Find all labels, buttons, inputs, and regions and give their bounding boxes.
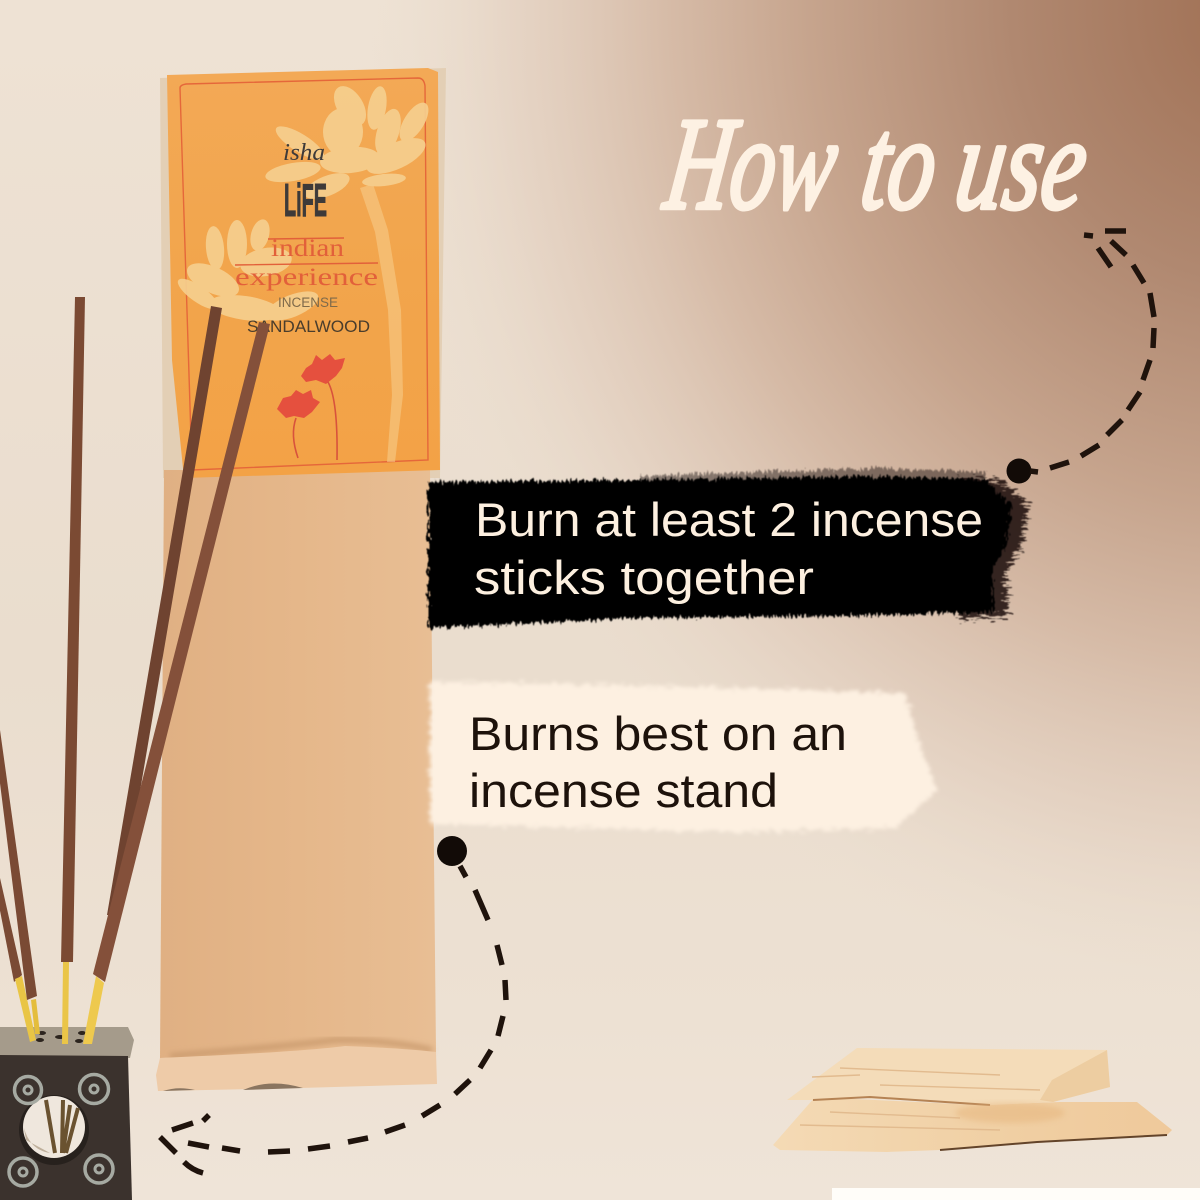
incense stick: right pair: [83, 306, 270, 1044]
incense stick: left: [0, 730, 40, 1034]
stand rivets: [9, 1074, 113, 1186]
arrow: callout to title: [1006, 231, 1154, 484]
package bottom flap: [156, 1046, 437, 1091]
cream brush callout: [430, 681, 937, 832]
title: [657, 91, 1097, 237]
callout text: [469, 707, 847, 817]
brush top bristles: [640, 468, 985, 490]
lower lotus petals: [204, 225, 226, 271]
package wrapper edge: [160, 68, 446, 478]
product name: [235, 235, 378, 291]
product name: experience: [235, 264, 378, 291]
arrow: callout to stand: [160, 836, 506, 1173]
title: to: [854, 91, 947, 237]
product type: INCENSE: [278, 295, 338, 310]
incense stick: centre: [61, 297, 85, 1044]
stand top face: [0, 1027, 134, 1058]
sandalwood pieces: [773, 1048, 1172, 1152]
brush right bristles: [960, 478, 1028, 618]
callout text: Burns best on an: [469, 707, 847, 760]
incense package: [156, 68, 446, 1091]
black brush stroke: [428, 476, 1012, 628]
kraft paper sleeve: [160, 470, 436, 1058]
logo: isha Life: isha: [283, 140, 325, 166]
callout text: incense stand: [469, 764, 778, 817]
title: How: [657, 91, 847, 237]
product name: indian: [271, 235, 345, 262]
orange label: LiFE: [284, 174, 327, 226]
cream brush stroke: [430, 681, 937, 832]
incense stick: far left short: [0, 878, 36, 1042]
stand hole: [19, 1095, 89, 1165]
stand front face: [0, 1055, 132, 1200]
logo: isha Life: [283, 140, 327, 226]
red lotus flowers: [277, 354, 345, 460]
incense stand: [0, 1027, 134, 1200]
cream lotus flowers: [174, 80, 434, 462]
callout text: [474, 493, 983, 604]
fragrance: SANDALWOOD: [247, 318, 370, 336]
title: use: [948, 91, 1097, 237]
orange label: [167, 68, 440, 478]
black brush callout: [428, 468, 1028, 628]
callout text: sticks together: [474, 551, 814, 604]
upper lotus stem: [360, 184, 403, 462]
callout text: Burn at least 2 incense: [475, 493, 983, 546]
